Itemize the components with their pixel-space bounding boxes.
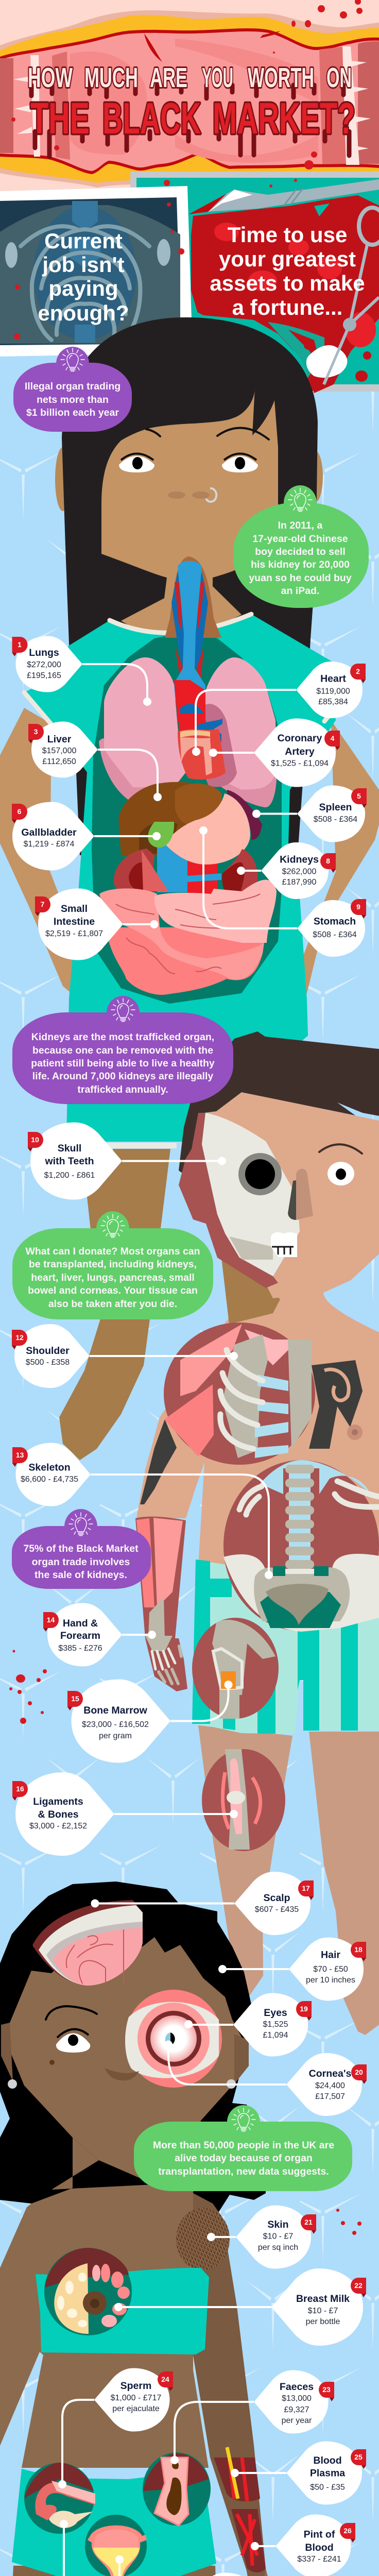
bubble: Lungs: $272,000 [27,660,61,669]
callout: what can I donate: bowel and corneas. Your tissue can [28,1285,198,1296]
bubble: Ligaments and Bones: $3,000 - £2,152 [29,1822,87,1831]
bubble: Hand and Forearm: $385 - £276 [58,1644,102,1653]
title: HOW [28,62,73,93]
bubble: Corneas: £17,507 [315,2092,345,2101]
figure: second patient skeleton and muscle [59,1031,379,2035]
bubble: Faeces: 23 [322,2385,331,2394]
bubble: Shoulder: Shoulder [26,1345,70,1357]
bubble: Gallbladder: Gallbladder [21,827,77,838]
bubble: Blood Plasma: 25 [354,2453,363,2461]
bubble: Liver: $157,000 [42,747,76,755]
bubble: Shoulder: 12 [15,1333,24,1342]
callout: kidneys most trafficked: patient still being able to live a healthy [31,1058,215,1069]
callout: illegal organ trading: Illegal organ trading [25,381,120,392]
bubble: Kidneys: £187,990 [282,878,316,887]
callout: 50,000 people alive: More than 50,000 people in the UK are [153,2140,334,2151]
bubble: Eyes: £1,094 [263,2031,288,2040]
bubble: Skull with Teeth: 10 [31,1136,39,1144]
callout: kidneys most trafficked: trafficked annually. [77,1084,168,1095]
bubble: Small Intestine [35,888,159,960]
callout: 75 percent kidneys: the sale of kidneys. [35,1569,127,1581]
callout: Chinese boy sold kidney [233,485,369,608]
bubble: Heart: £85,384 [318,698,348,706]
bubble: Heart: Heart [320,673,346,684]
bubble: Lungs [12,636,151,706]
bubble: Bone Marrow: Bone Marrow [83,1705,148,1716]
bubble: Hair: 18 [354,1945,363,1954]
bubble: Skull with Teeth: with Teeth [45,1156,94,1167]
bubble: Hair: Hair [321,1950,340,1961]
bubble: Sperm: 24 [161,2375,169,2383]
bubble: Small Intestine: Intestine [54,916,95,927]
bubble: Corneas: Cornea's [309,2068,351,2079]
bubble: Scalp: 17 [302,1884,310,1892]
callout: what can I donate: What can I donate? Most organs can [25,1246,200,1257]
bubble: Scalp: Scalp [263,1892,290,1904]
bubble: Hand and Forearm: Hand & [63,1618,98,1629]
bubble: Bone Marrow [67,1680,233,1763]
heading: time to use your greatest assets: Time to use [228,223,347,247]
bubble: Bone Marrow: $23,000 - £16,502 [82,1720,149,1729]
bubble: Blood Plasma: Blood [313,2455,342,2466]
callout: 50,000 people alive [134,2105,352,2191]
callout: Chinese boy sold kidney: yuan so he could buy [249,572,352,584]
bubble: Breast Milk: per bottle [306,2317,340,2326]
bubble: Sperm [58,2368,173,2488]
callout: 75 percent kidneys: organ trade involves [32,1556,130,1568]
bubble: Eyes: 19 [300,2005,308,2013]
bubble: Skeleton: 13 [16,1451,24,1459]
bubble: Faeces: £9,327 [284,2405,309,2414]
bubble: Scalp [91,1872,314,1935]
figure: third patient [0,1882,285,2576]
bubble: Skull with Teeth [28,1122,226,1199]
bubble: Hair: per 10 inches [306,1976,355,1985]
bubble: Coronary Artery: Coronary [278,733,322,744]
bubble: Lungs: £195,165 [27,671,61,680]
bubble: Liver: Liver [47,734,72,745]
callout: illegal organ trading: $1 billion each year [26,407,119,418]
callout: what can I donate: be transplanted, including kidneys, [29,1259,197,1270]
bubble: Faeces: $13,000 [282,2394,312,2403]
bubble: Ligaments and Bones [12,1772,238,1856]
heading: time to use your greatest assets: assets to make [210,271,365,295]
bubble: Eggs [60,2520,175,2576]
bubble: Eyes: Eyes [264,2007,287,2019]
callout: 75 percent kidneys [12,1509,151,1589]
bubble: Heart [192,662,366,756]
callout: illegal organ trading: nets more than [37,394,109,405]
bubble: Sperm: per ejaculate [112,2404,160,2413]
bubble: Gallbladder: $1,219 - £874 [24,840,74,849]
bubble: Kidneys: Kidneys [280,854,319,866]
heading: current job isn't paying enough: paying [48,276,118,300]
bubble: Blood Plasma: Plasma [310,2468,345,2479]
bubble: Sperm: Sperm [120,2380,151,2392]
title: YOU [202,62,233,93]
bubble: Spleen: 5 [357,792,361,800]
header: surgical wound [0,0,379,206]
bubble: Eyes [184,1993,312,2057]
bubble: Hair: $70 - £50 [313,1965,348,1974]
bubble: Lungs: 1 [18,640,22,649]
bubble: Heart: $119,000 [316,687,350,696]
bubble: Urine [115,2555,264,2576]
callout: what can I donate: also be taken after you die. [48,1298,177,1310]
callout: illegal organ trading [13,347,132,432]
bubble: Faeces: per year [282,2416,312,2425]
bubble: Hand and Forearm [43,1603,156,1666]
bubble: Stomach: Stomach [314,916,356,927]
heading: time to use your greatest assets: a fortune... [232,295,342,319]
callout: kidneys most trafficked: because one can be removed with the [32,1045,213,1056]
callout: Chinese boy sold kidney: 17-year-old Chinese [252,533,348,545]
title: MUCH [84,62,138,93]
bubble: Skeleton: Skeleton [28,1462,71,1473]
bubble: Ligaments and Bones: 16 [16,1785,24,1793]
bubble: Bone Marrow: 15 [71,1694,79,1703]
bubble: Heart: 2 [356,667,360,675]
title: BLACK [102,94,201,143]
callout: Chinese boy sold kidney: his kidney for 20,000 [251,559,350,570]
title: ON [326,62,352,93]
bubble: Skin: $10 - £7 [263,2232,293,2241]
bubble: Coronary Artery: $1,525 - £1,094 [271,759,329,768]
bubble: Pint of Blood [251,2514,355,2576]
heading: time to use your greatest assets [210,223,365,319]
bubble: Kidneys [237,842,336,899]
bubble: Ligaments and Bones: & Bones [38,1809,79,1820]
bubble: Lungs: Lungs [29,647,59,658]
bubble: Pint of Blood: 26 [343,2527,352,2535]
panel: scalpel and blood [130,172,379,393]
bubble: Pint of Blood: Pint of [304,2529,335,2540]
bubble: Coronary Artery [209,718,340,787]
callout: 50,000 people alive: transplantation, new data suggests. [158,2166,329,2177]
bubble: Liver: £112,650 [42,757,76,766]
heading: current job isn't paying enough: Current [44,229,123,253]
bubble: Skin: Skin [267,2219,289,2230]
bubble: Breast Milk [114,2268,366,2346]
bubble: Bone Marrow: per gram [99,1732,132,1740]
bubble: Liver [28,721,162,801]
callout: kidneys most trafficked [12,996,233,1104]
bubble: Coronary Artery: Artery [285,746,315,757]
figure: first patient with exposed organs [0,317,379,1142]
heading: current job isn't paying enough: enough? [38,301,129,325]
callout: Chinese boy sold kidney: an iPad. [281,585,319,597]
bubble: Liver: 3 [34,727,38,736]
bubble: Hand and Forearm: 14 [47,1616,55,1624]
bubble: Small Intestine: Small [61,903,88,914]
bubble: Small Intestine: $2,519 - £1,807 [45,929,103,938]
bubble: Corneas [164,2040,367,2116]
bubble: Skull with Teeth: Skull [58,1143,81,1154]
bubble: Blood Plasma: $50 - £35 [310,2483,345,2492]
bubble: Breast Milk: $10 - £7 [308,2307,338,2315]
bubble: Ligaments and Bones: Ligaments [33,1796,83,1807]
bubble: Eyes: $1,525 [263,2020,288,2029]
bubble: Shoulder: $500 - £358 [26,1358,70,1367]
bubble: Skull with Teeth: $1,200 - £861 [44,1171,95,1180]
bubble: Stomach: $508 - £364 [313,930,357,939]
bubble: Skin: 21 [304,2218,313,2226]
bubble: Kidneys: 8 [326,857,330,865]
bubble: Pint of Blood: Blood [305,2542,334,2553]
panel: chest x-ray [0,186,192,357]
bubble: Skin: per sq inch [258,2243,298,2252]
bubble: Stomach: 9 [356,903,360,911]
heading: current job isn't paying enough: job isn't [42,252,125,277]
bubble: Pint of Blood: $337 - £241 [297,2555,341,2564]
callout: 50,000 people alive: alive today because of organ [175,2153,313,2164]
callout: kidneys most trafficked: life. Around 7,000 kidneys are illegally [32,1071,213,1082]
bubble: Breast Milk: 22 [354,2281,363,2290]
bubble: Breast Milk: Breast Milk [296,2293,350,2304]
callout: Chinese boy sold kidney: In 2011, a [278,520,323,531]
callout: what can I donate [12,1211,213,1319]
bubble: Corneas: 20 [355,2068,363,2076]
title: ARE [150,62,187,93]
bubble: Spleen: Spleen [319,802,352,813]
title: WORTH [248,62,314,93]
bubble: Faeces [170,2370,334,2464]
heading: time to use your greatest assets: your greatest [219,247,356,271]
bubble: Hair [218,1937,366,2001]
callout: 75 percent kidneys: 75% of the Black Market [23,1543,139,1554]
bubble: Blood Plasma [231,2441,366,2505]
callout: what can I donate: heart, liver, lungs, pancreas, small [31,1272,195,1283]
title [28,62,355,157]
bubble: Sperm: $1,000 - £717 [111,2394,161,2402]
bubble: Coronary Artery: 4 [331,734,335,742]
bubble: Stomach [199,826,366,957]
bubble: Spleen [252,785,367,842]
bubble: Skeleton: $6,600 - £4,735 [21,1475,78,1484]
callout: kidneys most trafficked: Kidneys are the most trafficked organ, [31,1031,214,1043]
bubble: Scalp: $607 - £435 [255,1905,299,1914]
bubble: Spleen: $508 - £364 [314,815,357,824]
bubble: Gallbladder [12,802,161,871]
bubble: Corneas: $24,400 [315,2081,345,2090]
bubble: Small Intestine: 7 [41,900,45,908]
bubble: Skin [207,2205,316,2269]
bubble: Faeces: Faeces [280,2381,314,2393]
bubble: Kidneys: $262,000 [282,868,316,876]
bubble: Shoulder [12,1324,238,1388]
callout: Chinese boy sold kidney: boy decided to sell [255,546,346,557]
heading: current job isn't paying enough [38,229,129,325]
bubble: Gallbladder: 6 [18,807,22,816]
title: THE [30,94,90,143]
bubble: Hand and Forearm: Forearm [60,1630,100,1641]
bubble: Skeleton [12,1443,273,1579]
